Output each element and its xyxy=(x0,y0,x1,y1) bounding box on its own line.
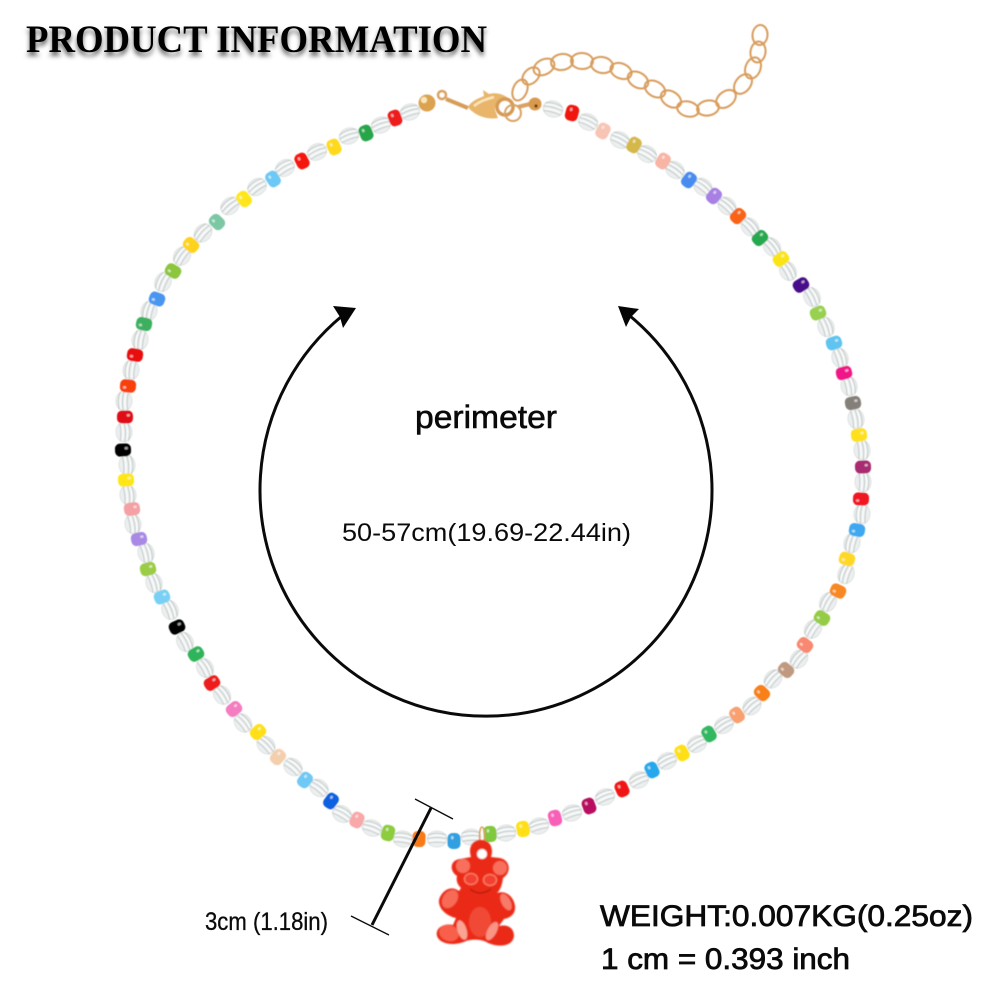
pendant: jump ring xyxy=(480,827,484,845)
title: PRODUCT INFORMATION xyxy=(26,18,487,61)
arrowhead: right xyxy=(618,306,639,327)
pendant size label: 3cm (1.18in) xyxy=(205,908,328,936)
necklace xyxy=(115,24,871,849)
unit conversion: 1 cm = 0.393 inch xyxy=(601,943,850,976)
lobster clasp xyxy=(418,90,542,121)
weight: WEIGHT:0.007KG(0.25oz) xyxy=(600,900,973,933)
perimeter measurement: 50-57cm(19.69-22.44in) xyxy=(342,519,631,547)
arrowhead: left xyxy=(333,306,356,328)
perimeter label: perimeter xyxy=(415,399,557,435)
pendant size dimension line xyxy=(351,799,453,935)
extender chain xyxy=(509,24,768,119)
perimeter arc with arrows xyxy=(260,306,712,716)
pendant: red bear charm xyxy=(437,840,515,946)
beads xyxy=(115,99,871,849)
